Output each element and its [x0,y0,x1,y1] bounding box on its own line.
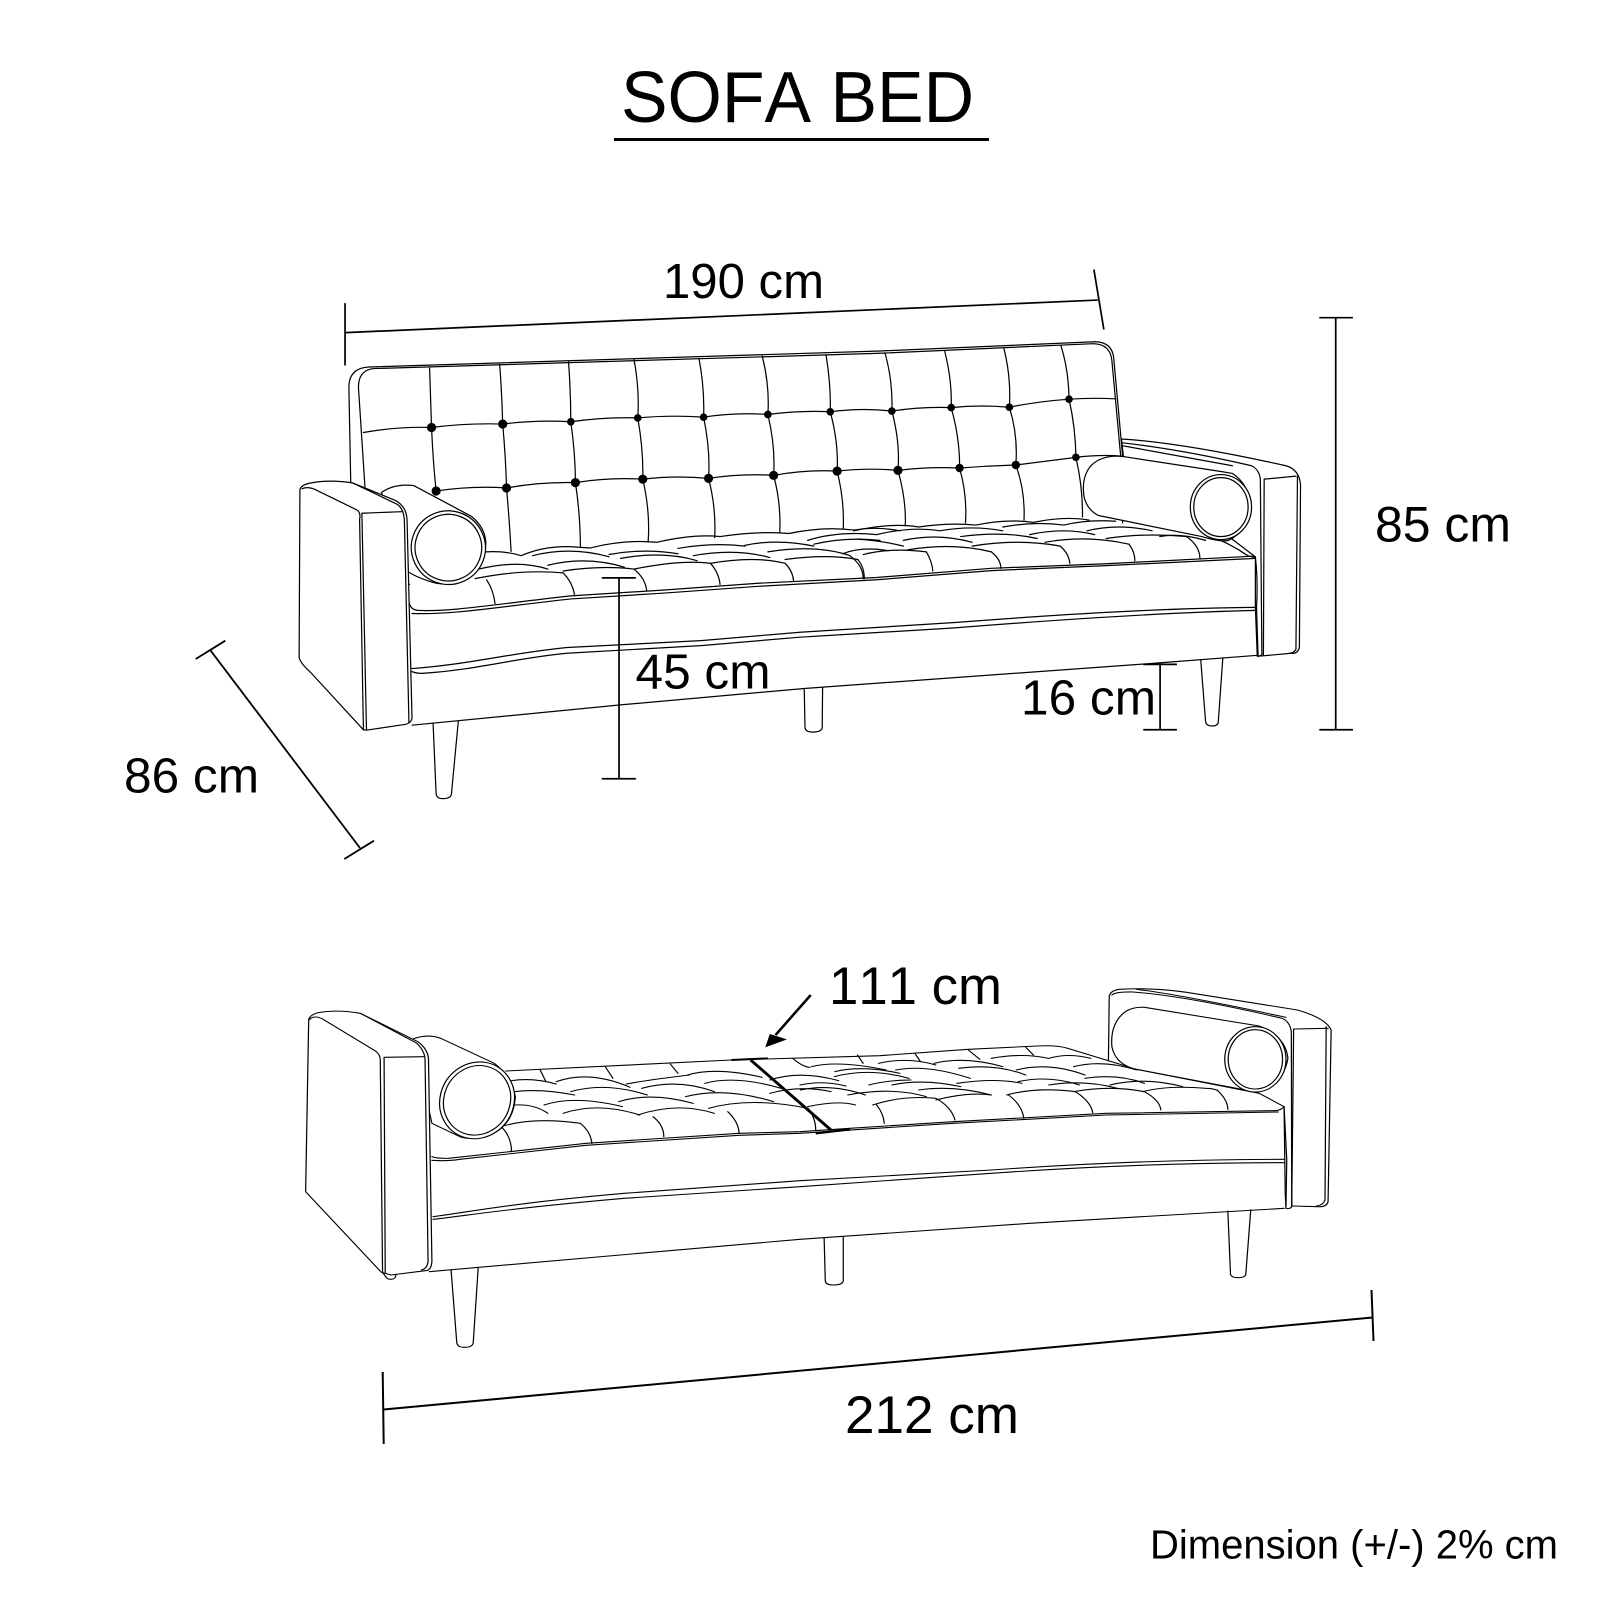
left bolster pillow [381,485,496,595]
bed front panels [429,1107,1287,1272]
dimension: 16 cm: 16 cm [1021,670,1156,726]
dimension: 85 cm: 85 cm [1375,496,1511,552]
sofa backrest with tufting [349,342,1123,584]
seat and base front panels [409,556,1259,725]
dimension: 212 cm: 212 cm [845,1386,1019,1445]
dimension: 190 cm: 190 cm [663,254,824,309]
arrow: points to fold line [765,995,811,1047]
tufting buttons [427,395,1080,496]
right armrest [1121,439,1301,656]
dimension: 86 cm [124,641,374,859]
illustration: sofa upright [299,342,1301,799]
sofa legs [433,657,1223,799]
dimension: 212 cm [383,1290,1374,1445]
dimension: 86 cm: 86 cm [124,749,259,804]
dimension: 190 cm [345,254,1104,366]
footnote: Dimension (+/-) 2% cm [1150,1522,1558,1568]
illustration: sofa unfolded as bed [306,989,1331,1347]
right armrest and bolster [1108,989,1331,1209]
left bolster pillow [412,1036,523,1145]
seat cushion with tufting [410,517,1255,623]
title: SOFA BED [621,58,974,138]
dimension: 45 cm: 45 cm [636,644,770,700]
mattress with tufting [501,1046,1284,1152]
left armrest [299,481,412,730]
dimension: 111 cm measure line: 111 cm [829,957,1002,1016]
right bolster pillow [1083,456,1252,541]
left armrest [306,1011,432,1279]
bed legs [451,1209,1251,1347]
dimension: 111 cm measure line [732,957,1002,1133]
